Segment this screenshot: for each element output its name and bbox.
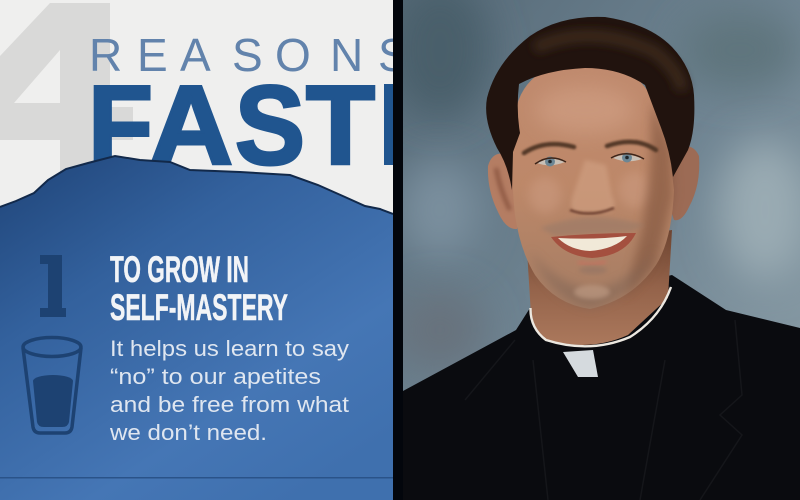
panel: infographic crop [0,0,409,500]
hair [486,17,694,190]
face [512,60,674,309]
text block: description: we don’t need. [109,420,267,445]
heading: FASTING: S [235,63,305,188]
eyebrows [524,142,656,153]
heading: To grow in self-mastery: SELF-MASTERY [110,287,288,328]
panel: torn blue paper [0,156,393,500]
jaw stubble shadow [537,262,635,308]
chin highlight [574,285,610,299]
text block: description: “no” to our apetites [110,364,321,389]
forehead highlight [539,88,631,134]
neck [527,230,672,345]
collar tab [563,350,598,377]
photo background [403,0,800,391]
heading: FASTING: A [149,63,233,188]
numeral 1 [40,255,66,317]
black jacket [403,275,800,500]
jacket lapel lines [465,320,742,500]
ears [488,146,699,229]
heading: FASTING: T [306,63,375,188]
soul patch [579,266,607,274]
heading: FASTING: F [88,63,153,188]
large background numeral 4 [0,3,133,180]
eyes [535,152,644,166]
white collar line [530,287,671,346]
text block: description: It helps us learn to say [110,336,349,361]
face side shadow [628,106,674,291]
cheek highlights [532,174,646,210]
mouth and smile [551,233,636,264]
icon: water glass [23,338,81,433]
heading: FASTING [94,84,393,166]
text block: description: and be free from what [110,392,349,417]
heading: To grow in self-mastery [110,256,288,320]
moustache shadow [544,217,638,236]
panel: portrait photo [390,0,800,500]
text block: description [109,336,349,445]
nose [570,160,615,214]
heading: To grow in self-mastery: TO GROW IN [110,249,249,290]
divider [393,0,403,500]
heading: REASONS: REASONS [89,29,409,81]
